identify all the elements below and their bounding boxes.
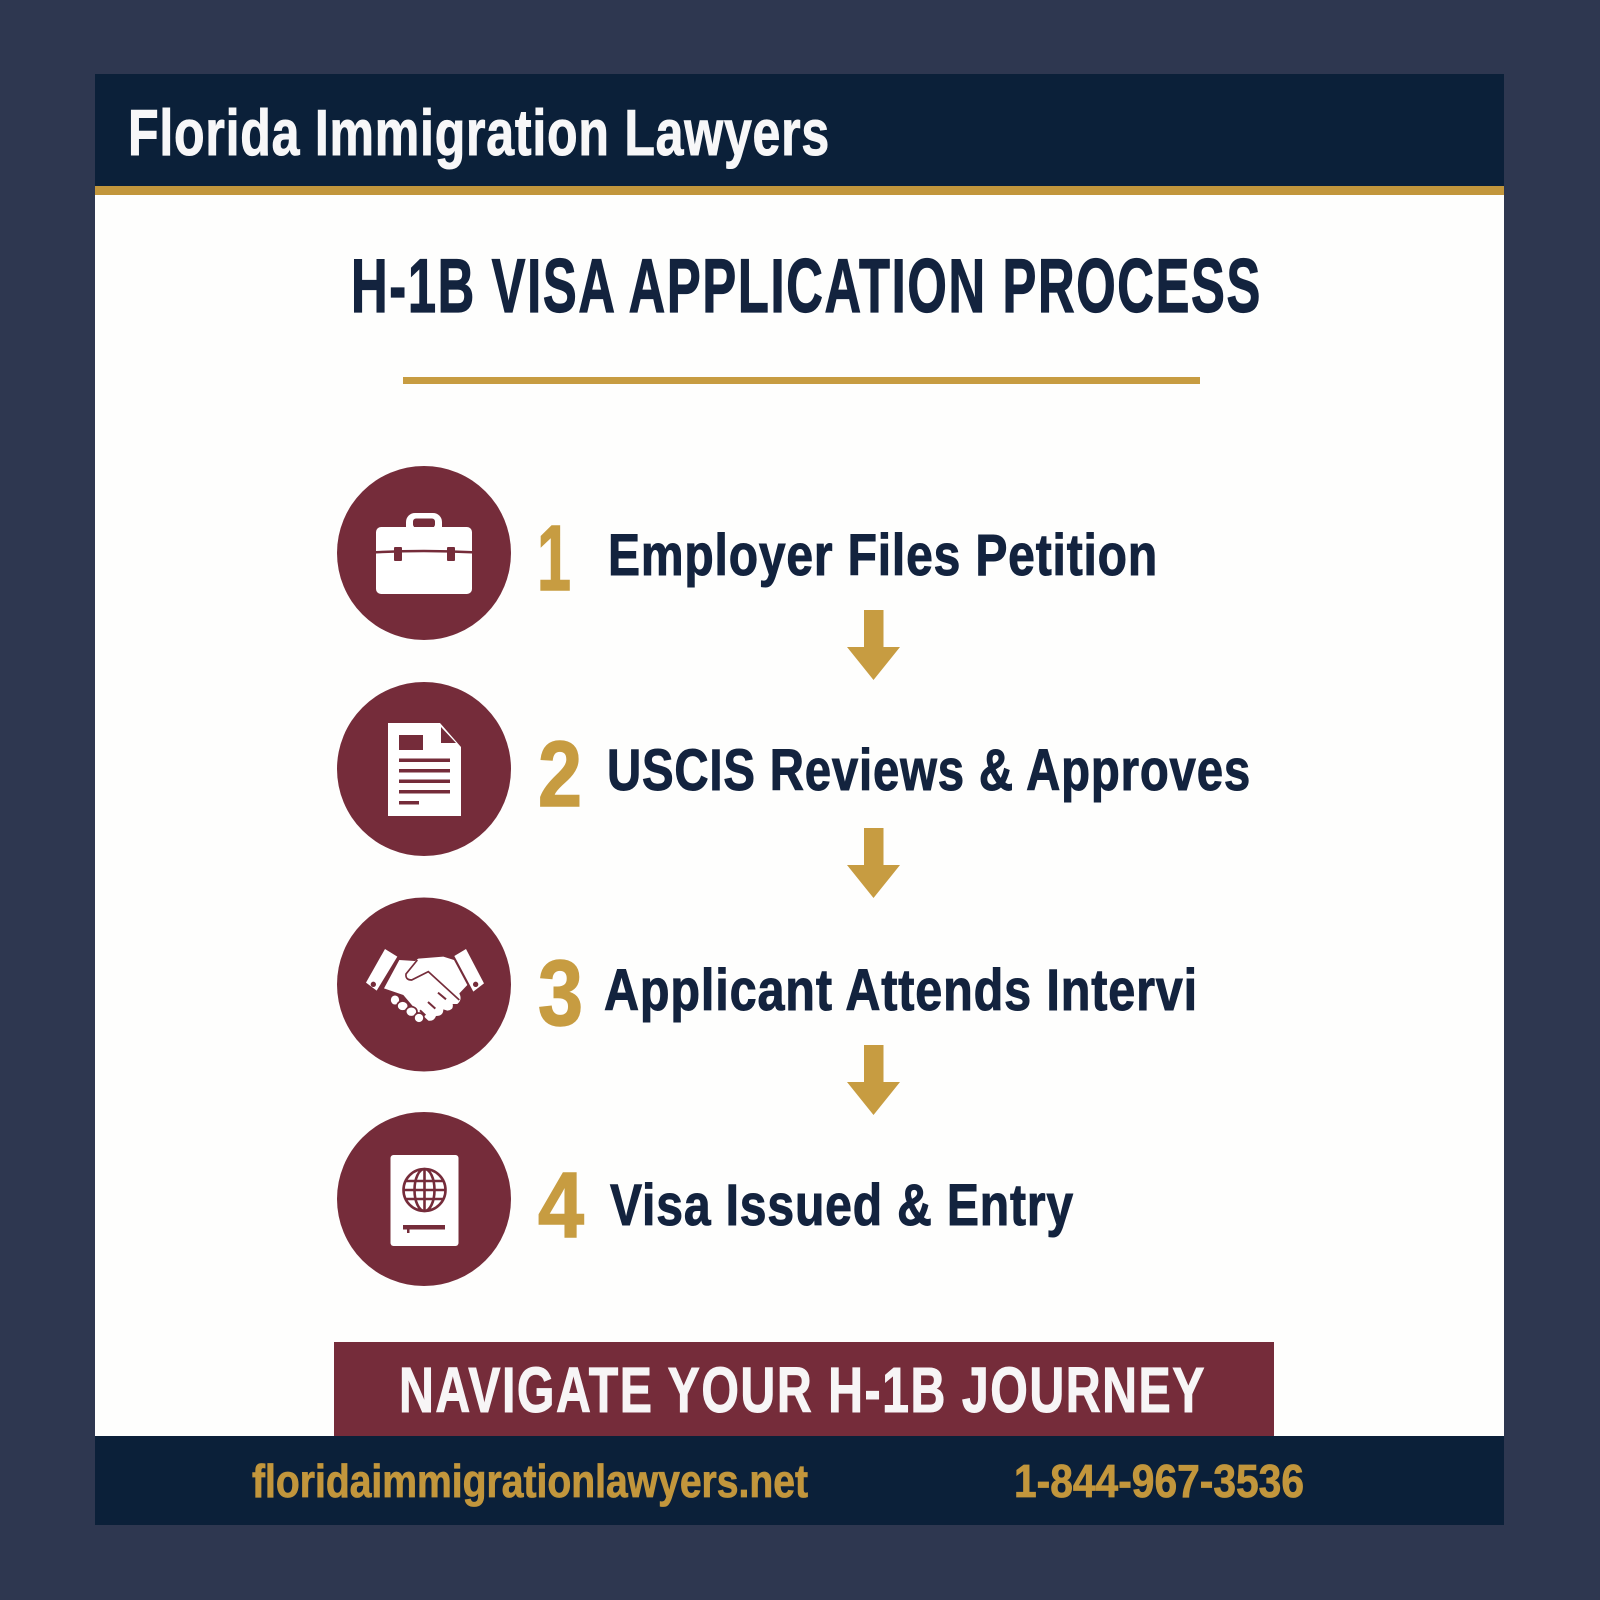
step number 3: 3 <box>538 941 583 1045</box>
arrow 1 <box>847 610 900 680</box>
title underline <box>403 377 1200 384</box>
call to action banner <box>334 1342 1274 1437</box>
step label 4: Visa Issued & Entry <box>610 1173 1074 1238</box>
arrow 3 <box>847 1045 900 1115</box>
panel: main card <box>95 74 1504 1525</box>
phone number: 1-844-967-3536 <box>1014 1455 1304 1507</box>
step label 1: Employer Files Petition <box>608 523 1158 588</box>
footer bar <box>95 1436 1504 1525</box>
step number 4: 4 <box>538 1153 584 1257</box>
step 1 <box>337 466 1158 640</box>
step number 1: 1 <box>537 506 571 610</box>
step label 2: USCIS Reviews & Approves <box>607 738 1251 803</box>
icon: briefcase <box>337 466 511 640</box>
icon: document <box>337 682 511 856</box>
icon: passport <box>337 1112 511 1286</box>
step 2 <box>337 682 1251 856</box>
header bar <box>95 74 1504 195</box>
website: floridaimmigrationlawyers.net <box>252 1455 808 1507</box>
header brand name: Florida Immigration Lawyers <box>128 96 830 169</box>
step number 2: 2 <box>538 722 582 826</box>
arrow 2 <box>847 828 900 898</box>
step 4 <box>337 1112 1074 1286</box>
step label 3: Applicant Attends Intervi <box>604 958 1198 1023</box>
banner text: NAVIGATE YOUR H-1B JOURNEY <box>399 1354 1206 1426</box>
icon: handshake <box>337 898 511 1072</box>
step 3 <box>337 898 1198 1072</box>
